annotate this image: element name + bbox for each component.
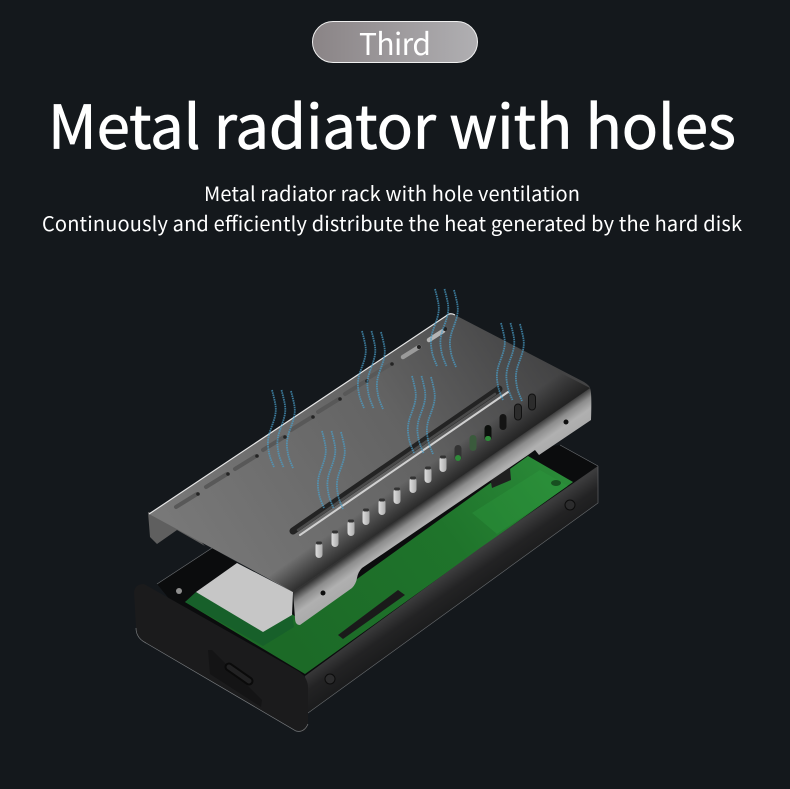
enclosure: lower box with circuit board — [134, 445, 598, 732]
side wall lower edge — [308, 466, 598, 713]
front panel — [134, 584, 308, 732]
board raised section — [472, 470, 568, 534]
USB-C recess — [208, 650, 262, 707]
rear rim lines — [157, 445, 598, 584]
top edge vents — [176, 327, 447, 507]
green hole — [551, 480, 561, 486]
screw holes on side — [320, 420, 568, 596]
box interior — [157, 445, 598, 677]
rear connector — [490, 468, 511, 488]
long slot — [293, 389, 508, 535]
board dark green edge — [185, 592, 294, 646]
circuit board — [185, 456, 573, 674]
box side wall — [305, 466, 598, 713]
heat waves — [268, 289, 524, 509]
left fold — [148, 512, 205, 546]
subtitle text block — [42, 178, 742, 237]
subtitle text block: Continuously and efficiently distribute the heat generated by the hard disk — [42, 208, 742, 237]
bright top edge — [149, 314, 455, 514]
subtitle text block: Metal radiator rack with hole ventilation — [204, 178, 580, 207]
thermal pad — [196, 563, 293, 632]
fold shading — [264, 373, 590, 592]
badge: Third — [312, 20, 478, 64]
plate top — [149, 314, 590, 592]
front panel lower edge — [136, 628, 308, 731]
radiator: metal plate — [148, 314, 591, 625]
screw post — [176, 588, 182, 594]
title: Metal radiator with holes — [48, 80, 736, 166]
connector strip — [338, 590, 405, 639]
ventilation holes row — [316, 394, 536, 558]
plate front side — [293, 388, 591, 625]
badge: Third: Third — [359, 20, 431, 64]
USB-C port — [229, 667, 249, 681]
side screws — [325, 500, 575, 684]
